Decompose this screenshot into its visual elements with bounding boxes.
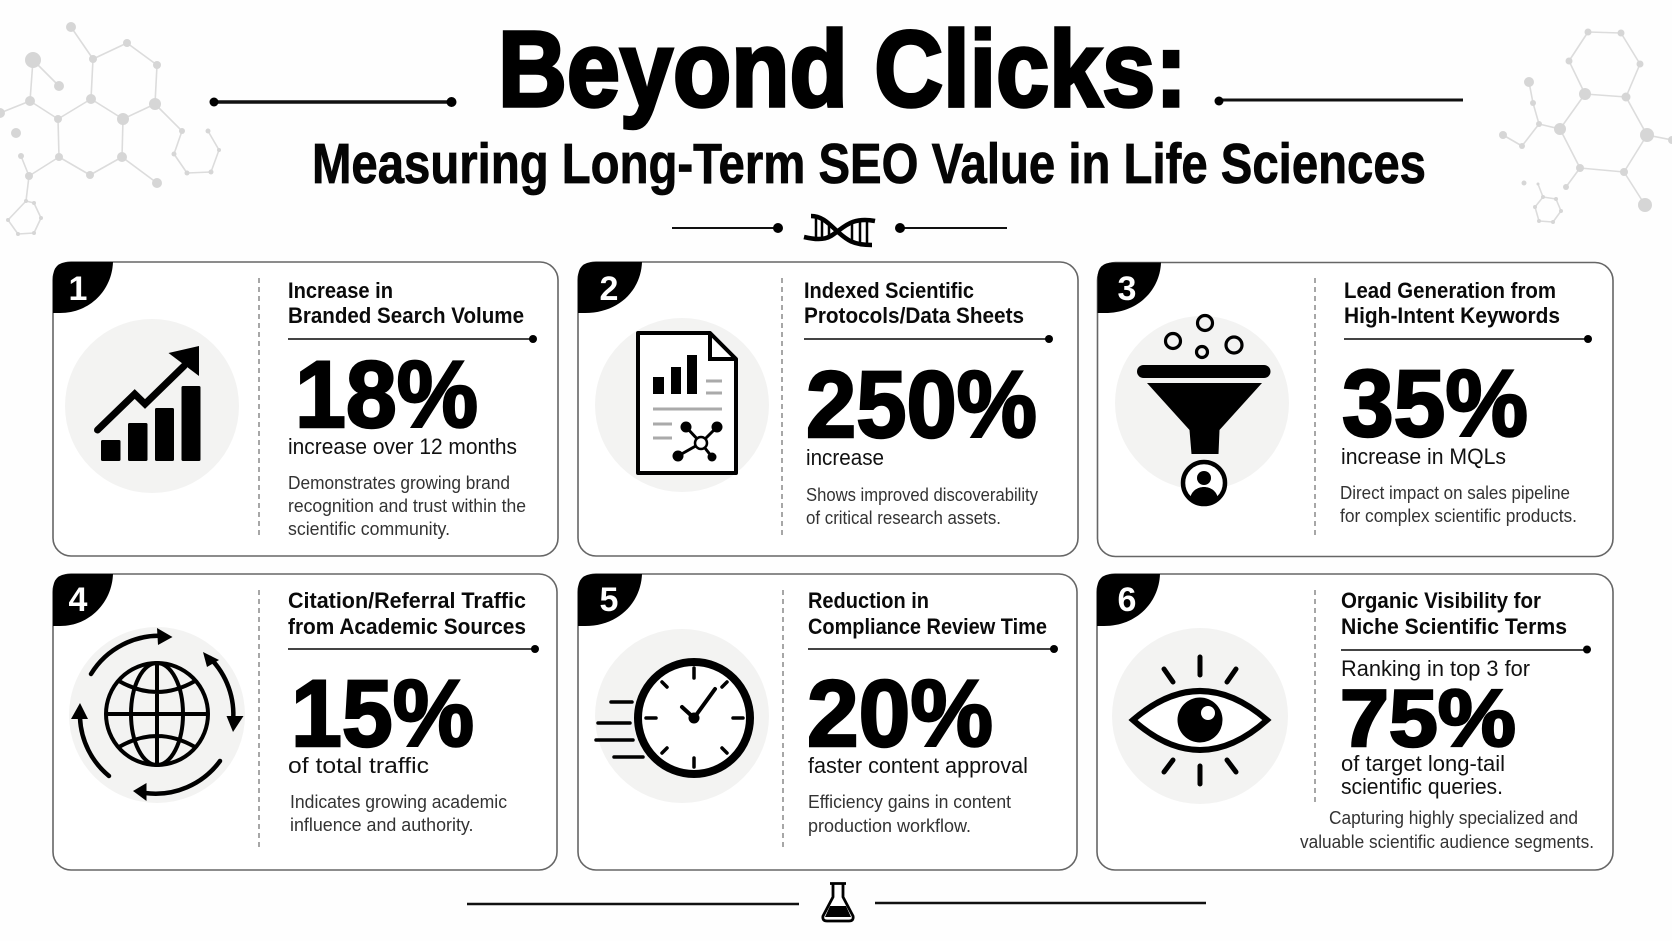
number badge 6: 6 (1118, 581, 1136, 619)
title rule left (210, 97, 456, 107)
heading: Protocols/Data Sheets (804, 303, 1024, 328)
molecule decoration left (0, 22, 221, 236)
icon: globe with cycle arrows (69, 627, 245, 803)
panel: card 6 organic visibility (1097, 574, 1613, 870)
icon: funnel with person (1115, 316, 1289, 504)
description: influence and authority. (290, 814, 474, 835)
subtitle: Measuring Long-Term SEO Value in Life Sciences (312, 132, 1426, 196)
stat lead-in: Ranking in top 3 for (1341, 656, 1530, 681)
heading: from Academic Sources (288, 614, 526, 639)
title: Beyond Clicks: (498, 8, 1187, 129)
stat 75%: 75% (1340, 674, 1516, 764)
heading: Citation/Referral Traffic (288, 588, 526, 613)
description: scientific community. (288, 518, 450, 539)
stat 35%: 35% (1342, 351, 1528, 457)
heading: Indexed Scientific (804, 278, 974, 303)
icon: data sheet document (595, 318, 769, 492)
description: Efficiency gains in content (808, 791, 1011, 812)
number badge 3 (1098, 262, 1161, 313)
stat caption: faster content approval (808, 753, 1028, 778)
heading: Reduction in (808, 588, 929, 613)
description: production workflow. (808, 815, 971, 836)
title rule right (1214, 96, 1463, 106)
stat 18%: 18% (295, 342, 478, 448)
number badge 1 (53, 262, 113, 313)
panel: card 5 compliance review (578, 574, 1077, 870)
description: Capturing highly specialized and (1329, 807, 1578, 828)
number badge 2 (578, 262, 642, 313)
panel: card 4 citation traffic (53, 574, 557, 870)
stat caption: of target long-tail (1341, 751, 1505, 776)
icon: eye (1112, 628, 1288, 804)
stat caption: increase in MQLs (1341, 444, 1506, 469)
description: Direct impact on sales pipeline (1340, 482, 1570, 503)
heading: Organic Visibility for (1341, 588, 1541, 613)
number badge 4: 4 (69, 581, 88, 619)
heading: Branded Search Volume (288, 303, 524, 328)
heading: Increase in (288, 278, 393, 303)
stat caption: increase (806, 445, 884, 470)
icon: DNA helix (804, 216, 875, 245)
number badge 4 (53, 574, 113, 626)
panel: card 1 branded search volume (53, 262, 558, 556)
panel: card 3 lead generation (1098, 262, 1613, 556)
stat caption: scientific queries. (1341, 774, 1503, 799)
description: Shows improved discoverability (806, 484, 1039, 505)
stat 15%: 15% (291, 661, 474, 767)
heading: Compliance Review Time (808, 614, 1047, 639)
stat 250%: 250% (806, 352, 1037, 458)
description: Demonstrates growing brand (288, 472, 510, 493)
number badge 1: 1 (69, 270, 87, 308)
description: valuable scientific audience segments. (1300, 831, 1594, 852)
heading: Niche Scientific Terms (1341, 614, 1567, 639)
footer divider with flask icon (467, 884, 1206, 921)
description: of critical research assets. (806, 507, 1001, 528)
description: Indicates growing academic (290, 791, 507, 812)
number badge 6 (1097, 574, 1160, 626)
icon: flask (823, 884, 853, 921)
heading: High-Intent Keywords (1344, 303, 1560, 328)
divider with DNA icon (672, 216, 1007, 245)
description: recognition and trust within the (288, 495, 526, 516)
stat caption: of total traffic (288, 753, 429, 778)
number badge 5 (578, 574, 642, 626)
number badge 2: 2 (600, 270, 618, 308)
icon: rising bar chart (65, 319, 239, 493)
heading: Lead Generation from (1344, 278, 1556, 303)
icon: fast clock (595, 629, 769, 803)
stat caption: increase over 12 months (288, 434, 517, 459)
stat 20%: 20% (807, 661, 993, 767)
number badge 5: 5 (600, 581, 618, 619)
panel: card 2 indexed protocols (578, 262, 1078, 556)
description: for complex scientific products. (1340, 505, 1577, 526)
molecule decoration right (1499, 28, 1672, 224)
number badge 3: 3 (1118, 270, 1136, 308)
